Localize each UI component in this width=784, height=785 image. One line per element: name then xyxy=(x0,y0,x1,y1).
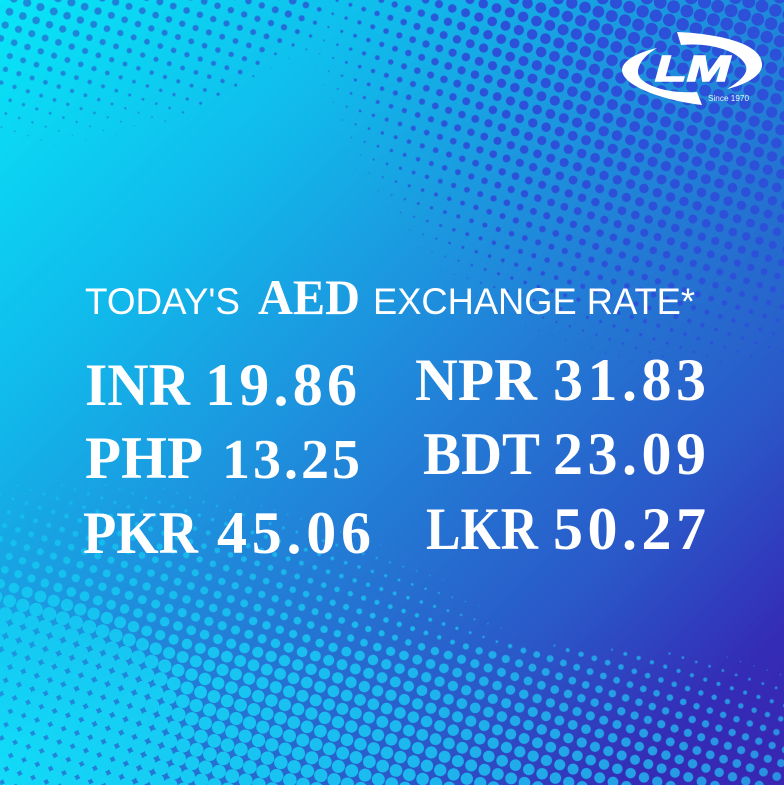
rate: NPR: 31.83 xyxy=(553,347,706,413)
rate: PHP: 13.25 xyxy=(222,429,360,491)
halftone: bottom light dots xyxy=(0,480,784,785)
logo letters: LM xyxy=(655,48,731,89)
heading: exchange rate: EXCHANGE RATE* xyxy=(373,281,695,322)
rate: INR: 19.86 xyxy=(205,352,357,418)
rate: PHP xyxy=(85,425,360,491)
heading: AED: AED xyxy=(258,269,360,325)
logo tagline: Since 1970 xyxy=(708,94,750,103)
rate: LKR: LKR xyxy=(426,496,539,562)
rate: PKR: 45.06 xyxy=(217,500,371,566)
rate: PKR: PKR xyxy=(83,500,199,566)
rate: PKR xyxy=(83,500,371,566)
halftone: top dark dots xyxy=(0,0,784,374)
rate: BDT: BDT xyxy=(423,421,540,487)
logo swoosh top right xyxy=(677,32,762,89)
heading: today's: TODAY'S xyxy=(85,281,240,322)
logo: LM since 1970 xyxy=(622,32,762,105)
rate: BDT: 23.09 xyxy=(553,421,706,487)
rates: left column xyxy=(83,352,371,566)
heading xyxy=(85,269,695,325)
rate: BDT xyxy=(423,421,706,487)
rate: INR: INR xyxy=(85,352,191,418)
rate: NPR xyxy=(415,347,706,413)
rates: right column xyxy=(415,347,706,562)
rate: INR xyxy=(85,352,357,418)
rate: LKR: 50.27 xyxy=(553,496,706,562)
rate: LKR xyxy=(426,496,706,562)
logo swoosh bottom left xyxy=(622,48,702,105)
rate: NPR: NPR xyxy=(415,347,538,413)
rate: PHP: PHP xyxy=(85,425,203,491)
